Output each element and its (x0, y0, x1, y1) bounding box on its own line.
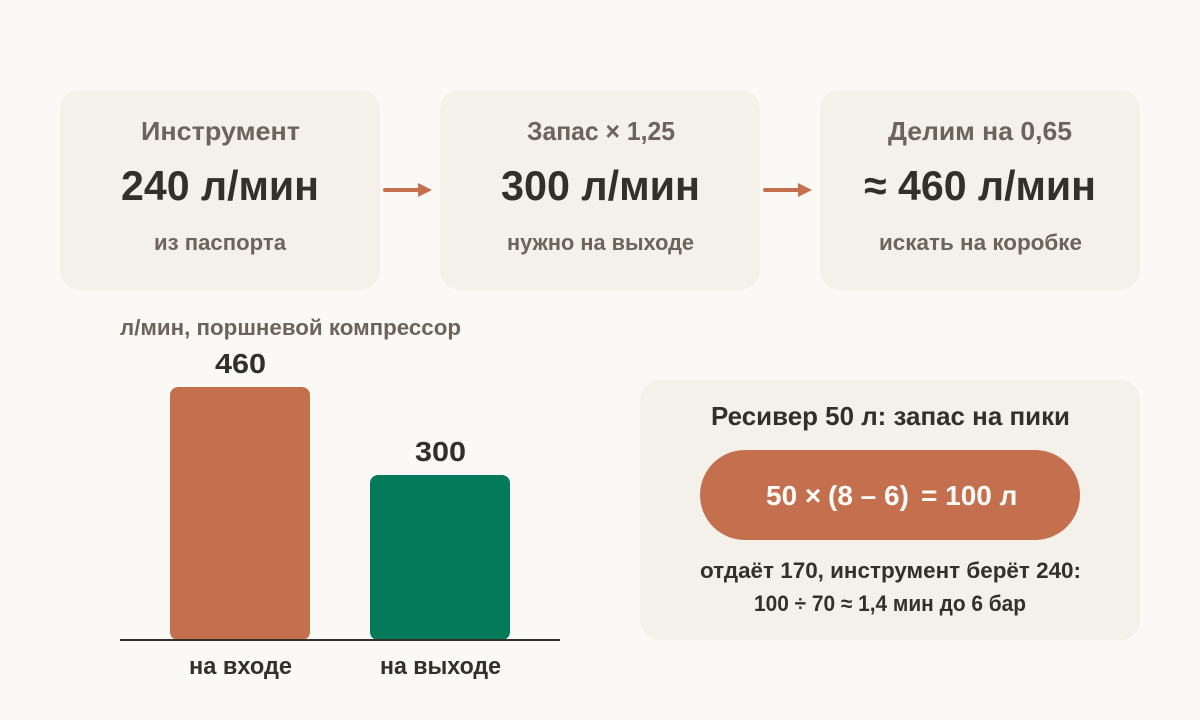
step 3 value: ≈ 460 л/мин (864, 162, 1096, 209)
chart title: л/мин, поршневой компрессор (120, 315, 461, 340)
panel: step 3, divide (820, 90, 1140, 290)
category label inlet: на входе (189, 653, 292, 680)
step 2 label: Запас × 1,25 (527, 116, 675, 146)
bar: inlet 460 (170, 387, 310, 640)
panel: step 1, tool (60, 90, 380, 290)
step 1 value: 240 л/мин (121, 162, 319, 209)
chart baseline (120, 639, 560, 641)
category label outlet: на выходе (380, 653, 501, 680)
formula pill: (8 – 6) (828, 480, 909, 511)
value label 300: 300 (415, 436, 466, 467)
receiver note line 2: 100 ÷ 70 ≈ 1,4 мин до 6 бар (754, 591, 1026, 616)
formula pill (700, 450, 1080, 540)
step 1 note: из паспорта (154, 230, 287, 255)
step 2 value: 300 л/мин (501, 162, 700, 209)
bar: outlet 300 (370, 475, 510, 640)
receiver note line 1: отдаёт 170, инструмент берёт 240: (700, 558, 1081, 583)
step 2 note: нужно на выходе (507, 230, 694, 255)
bar chart: piston compressor flow (120, 315, 560, 680)
arrow: step 2 to step 3 (765, 183, 812, 197)
formula pill: = 100 л (921, 480, 1017, 511)
panel: receiver (640, 380, 1140, 640)
panel: step 2, margin (440, 90, 760, 290)
step 1 label: Инструмент (141, 116, 300, 146)
arrow: step 1 to step 2 (385, 183, 432, 197)
step 3 note: искать на коробке (879, 230, 1082, 255)
value label 460: 460 (215, 348, 266, 379)
step 3 label: Делим на 0,65 (888, 116, 1072, 146)
receiver heading: Ресивер 50 л: запас на пики (711, 401, 1070, 431)
formula pill: 50 × (766, 480, 821, 511)
